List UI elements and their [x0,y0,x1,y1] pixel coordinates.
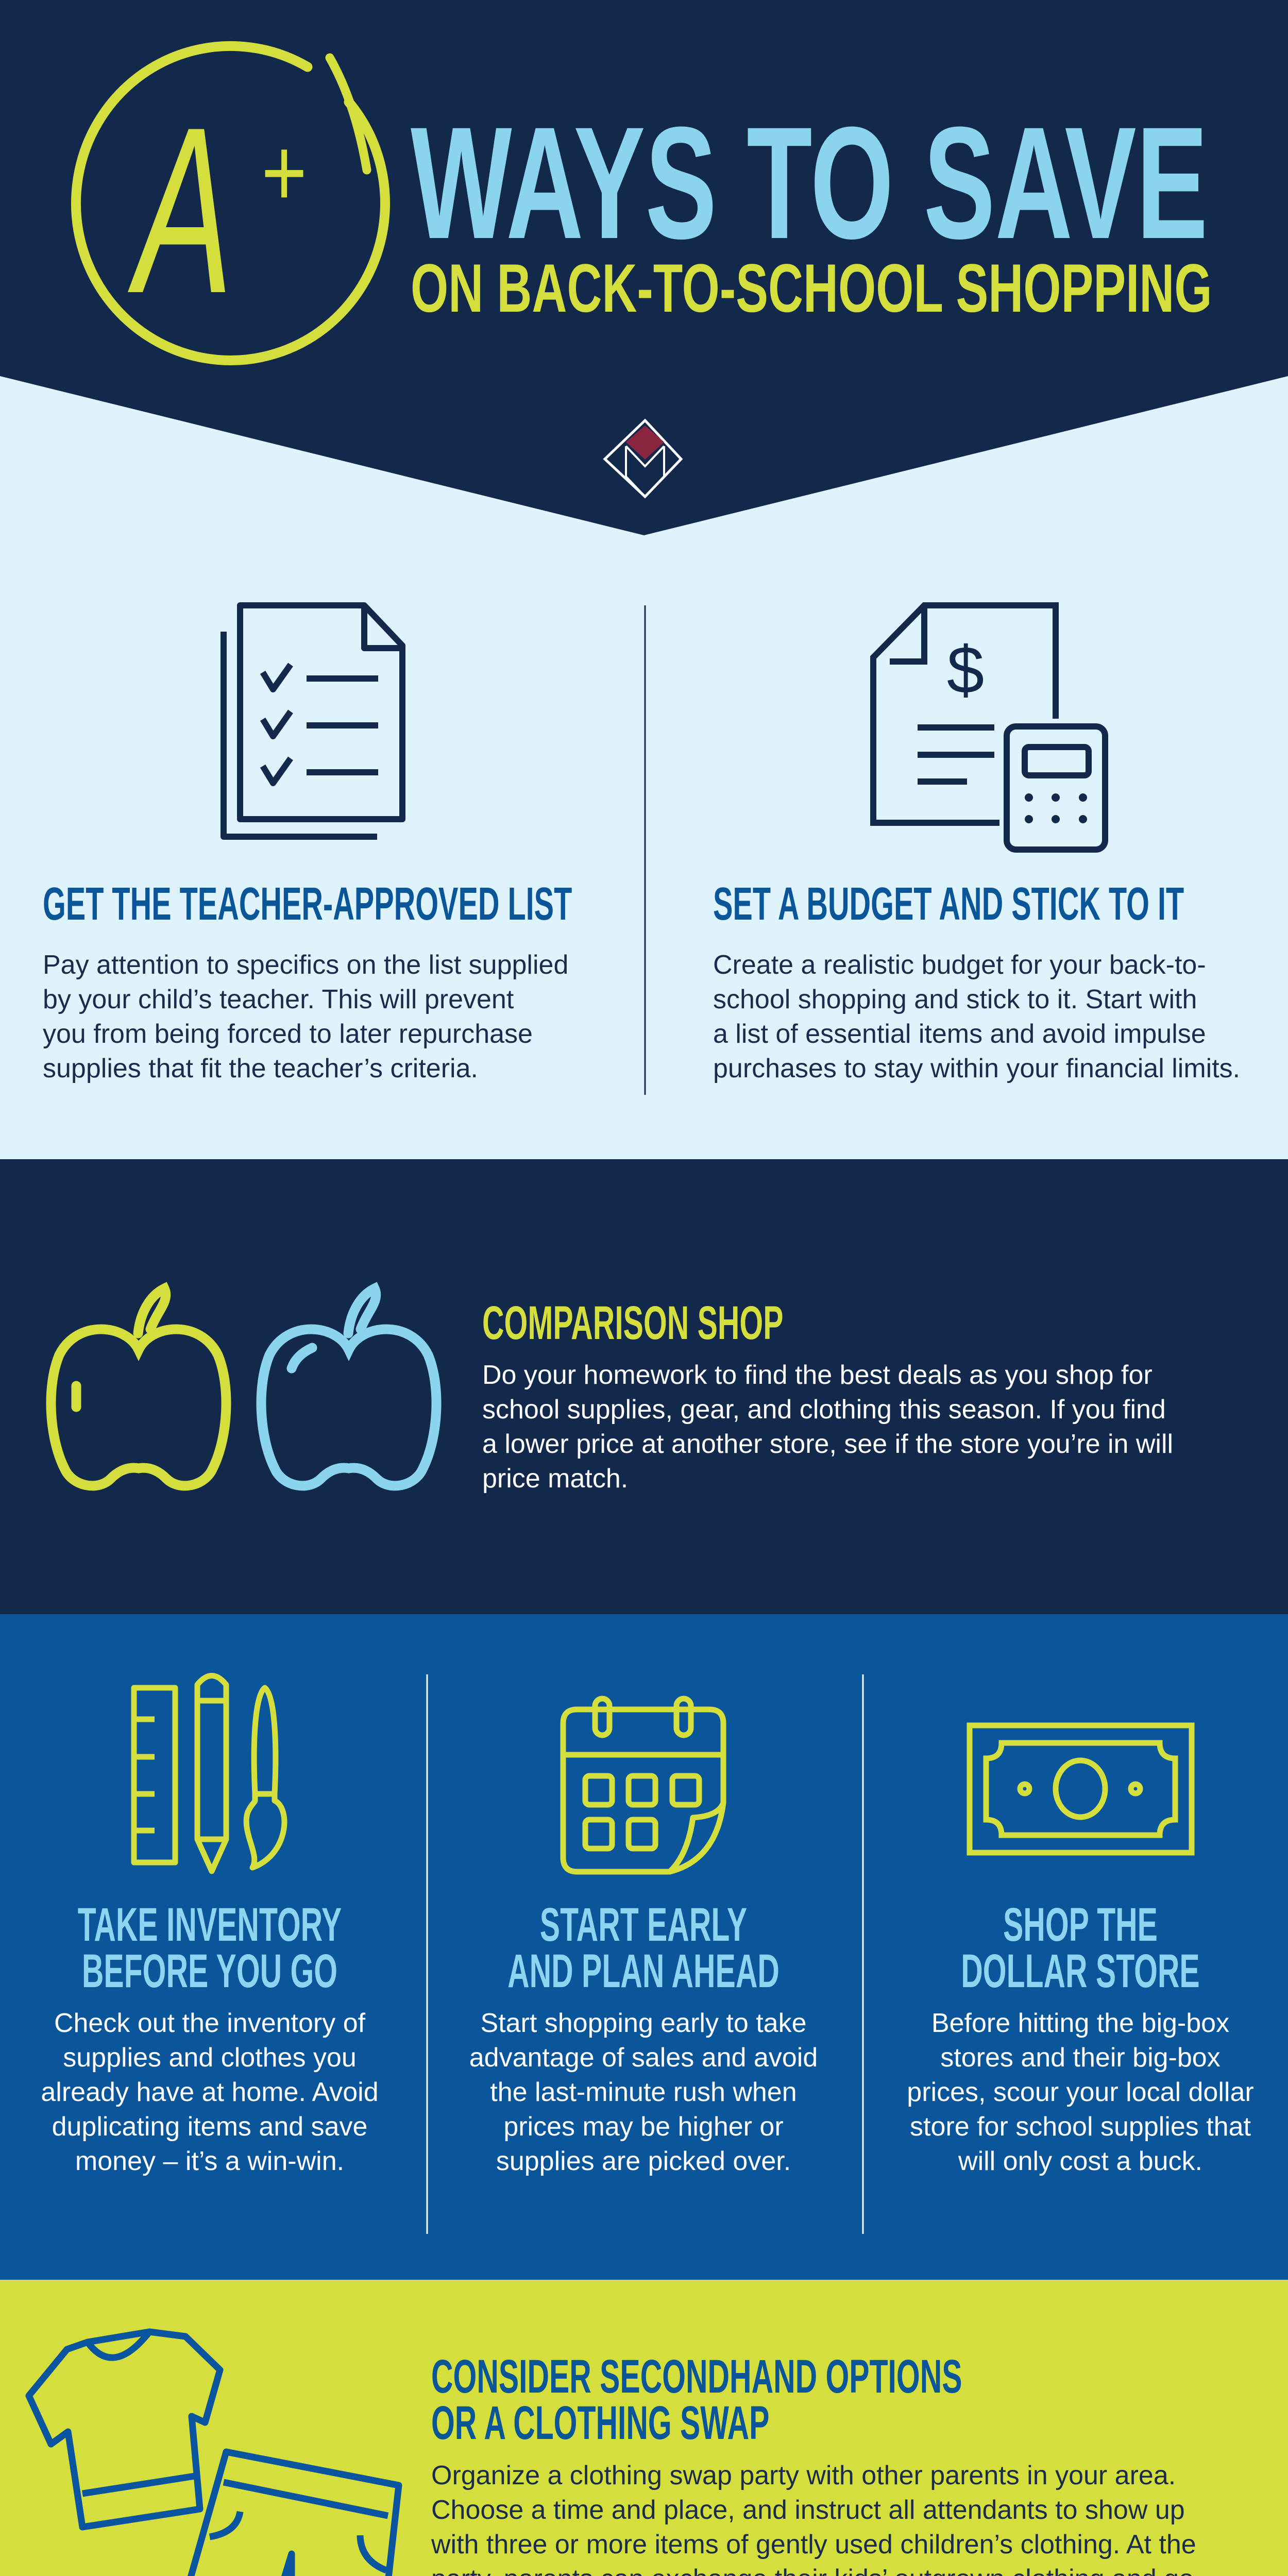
text: comparison shop: a lower price at another store, see if the store you’re in will [482,1429,1173,1459]
text: secondhand: with three or more items of gently used children’s clothing. At the [431,2530,1196,2560]
text: teacher list: supplies that fit the teacher’s criteria. [43,1054,478,1083]
heading: budget: SET A BUDGET AND STICK TO IT [713,878,1184,930]
text: dollar store [907,2008,1254,2176]
icon: ruler pencil brush [134,1675,284,1871]
text: start early: supplies are picked over. [496,2146,791,2176]
text: comparison shop [482,1360,1173,1494]
heading: take inventory: TAKE INVENTORY [78,1899,342,1951]
icon: budget document with calculator [873,605,1105,850]
heading: secondhand [431,2350,962,2449]
title: WAYS TO SAVE [411,93,1208,272]
heading: comparison shop: COMPARISON SHOP [482,1297,783,1349]
icon: A+ grade circle [76,46,385,360]
heading: start early [507,1899,779,1997]
heading: dollar store [961,1899,1200,1997]
icon: dollar bill [970,1725,1192,1853]
text: comparison shop: price match. [482,1464,628,1494]
text: budget [713,950,1240,1083]
icon: A+ grade circle: + [260,118,306,227]
icon: calendar [563,1699,723,1872]
heading: take inventory [78,1899,342,1997]
heading: take inventory: BEFORE YOU GO [82,1945,337,1997]
icon: yellow apple [51,1289,226,1486]
text: budget: purchases to stay within your financial limits. [713,1054,1240,1083]
icon: logo diamond [605,420,681,497]
text: comparison shop: school supplies, gear, and clothing this season. If you find [482,1395,1166,1425]
text: dollar store: stores and their big-box [940,2043,1221,2073]
heading: dollar store: DOLLAR STORE [961,1945,1200,1997]
text: start early: advantage of sales and avoid [469,2043,818,2073]
text: teacher list: Pay attention to specifics on the list supplied [43,950,568,980]
heading: start early: START EARLY [540,1899,747,1951]
text: take inventory: already have at home. Avoid [41,2077,379,2107]
icon: budget document with calculator: $ [947,632,984,707]
text: start early: prices may be higher or [503,2112,784,2142]
text: teacher list [43,950,568,1083]
heading: secondhand: CONSIDER SECONDHAND OPTIONS [431,2350,962,2403]
icon: t-shirt [29,2332,220,2527]
text: take inventory: duplicating items and save [52,2112,367,2142]
text: secondhand [431,2461,1196,2576]
text: start early [469,2008,818,2176]
text: budget: a list of essential items and avoid impulse [713,1019,1206,1049]
text: dollar store: Before hitting the big-box [931,2008,1229,2038]
text: teacher list: you from being forced to later repurchase [43,1019,533,1049]
text: start early: the last-minute rush when [490,2077,797,2107]
heading: start early: AND PLAN AHEAD [507,1945,779,1997]
icon: checklist [224,605,402,837]
text: dollar store: prices, scour your local dollar [907,2077,1254,2107]
icon: shorts [179,2452,399,2576]
text: secondhand: Organize a clothing swap party with other parents in your area. [431,2461,1176,2490]
text: dollar store: will only cost a buck. [958,2146,1202,2176]
heading: secondhand: OR A CLOTHING SWAP [431,2397,769,2449]
icon: blue apple [261,1289,436,1486]
text: budget: school shopping and stick to it. Start with [713,985,1197,1014]
text: take inventory: Check out the inventory of [54,2008,365,2038]
text: comparison shop: Do your homework to find the best deals as you shop for [482,1360,1153,1390]
text: take inventory: money – it’s a win-win. [75,2146,344,2176]
text: secondhand: Choose a time and place, and instruct all attendants to show up [431,2495,1185,2525]
text: take inventory: supplies and clothes you [63,2043,357,2073]
text: dollar store: store for school supplies that [910,2112,1251,2142]
heading: dollar store: SHOP THE [1003,1899,1158,1951]
heading: teacher-approved list: GET THE TEACHER-APPROVED LIST [43,878,572,930]
text: start early: Start shopping early to take [480,2008,807,2038]
text: teacher list: by your child’s teacher. This will prevent [43,985,514,1014]
text: take inventory [41,2008,379,2176]
subtitle: ON BACK-TO-SCHOOL SHOPPING [411,250,1212,327]
text: budget: Create a realistic budget for your back-to- [713,950,1206,980]
icon: A+ grade circle: A [126,78,233,343]
